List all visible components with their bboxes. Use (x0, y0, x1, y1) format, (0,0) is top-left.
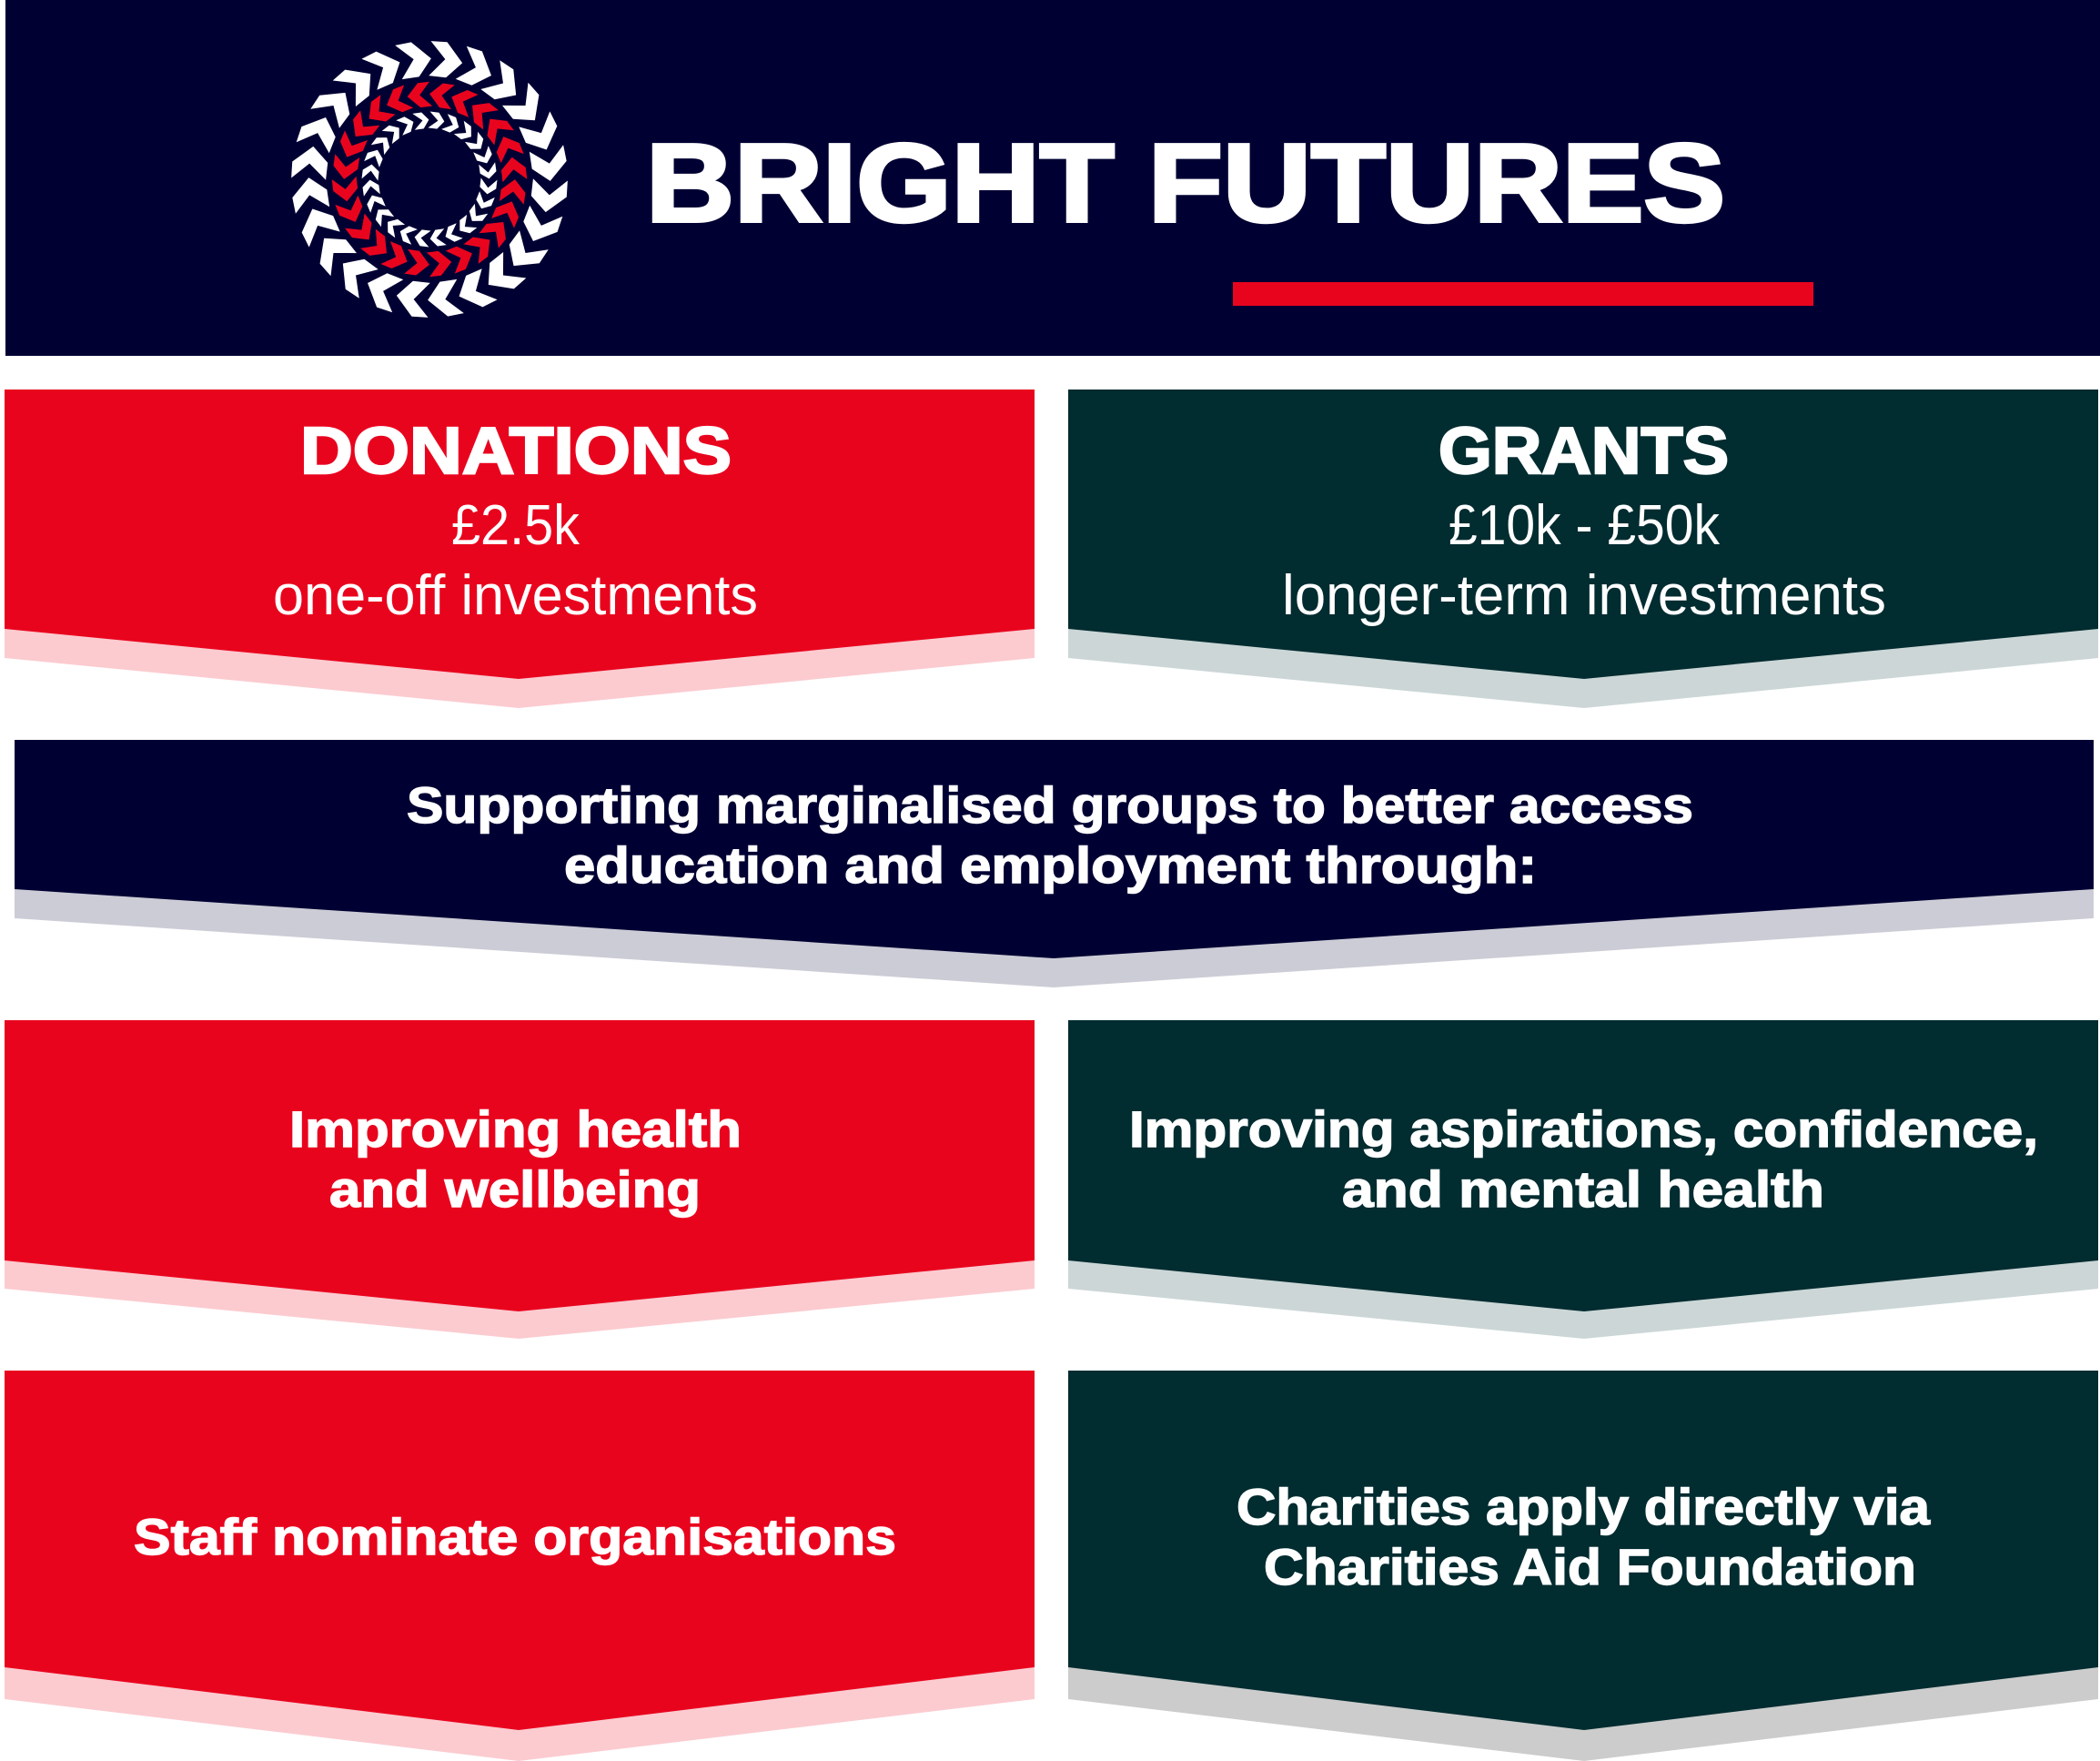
donation amount: £2.5k (451, 494, 581, 557)
grant amount: £10k - £50k (1449, 494, 1721, 557)
panel: improving aspirations (1068, 1020, 2098, 1339)
donation description: one-off investments (273, 564, 758, 627)
panel: header banner (5, 0, 2100, 356)
panel: charities apply (1068, 1371, 2098, 1761)
statement line 1: Supporting marginalised groups to better access (407, 776, 1693, 834)
icon: circular chevron logo (273, 23, 586, 336)
title: BRIGHT FUTURES (646, 121, 1725, 245)
charities line 2: Charities Aid Foundation (1264, 1538, 1916, 1595)
charities line 1: Charities apply directly via (1237, 1478, 1931, 1535)
panel: staff nominate (5, 1371, 1035, 1761)
grant description: longer-term investments (1282, 564, 1886, 627)
panel: supporting statement (15, 740, 2094, 987)
aspirations text: Improving aspirations, confidence, (1129, 1100, 2038, 1158)
statement line 2: education and employment through: (564, 836, 1537, 894)
heading: donations: DONATIONS (300, 415, 732, 488)
panel: grants (1068, 390, 2098, 708)
title underline bar (1233, 282, 1813, 306)
panel: donations (5, 390, 1035, 708)
health text: Improving health (289, 1100, 742, 1158)
wellbeing text: and wellbeing (329, 1160, 701, 1218)
staff text: Staff nominate organisations (134, 1508, 896, 1565)
heading: grants: GRANTS (1439, 415, 1729, 488)
mental health text: and mental health (1342, 1160, 1824, 1218)
panel: improving health (5, 1020, 1035, 1339)
